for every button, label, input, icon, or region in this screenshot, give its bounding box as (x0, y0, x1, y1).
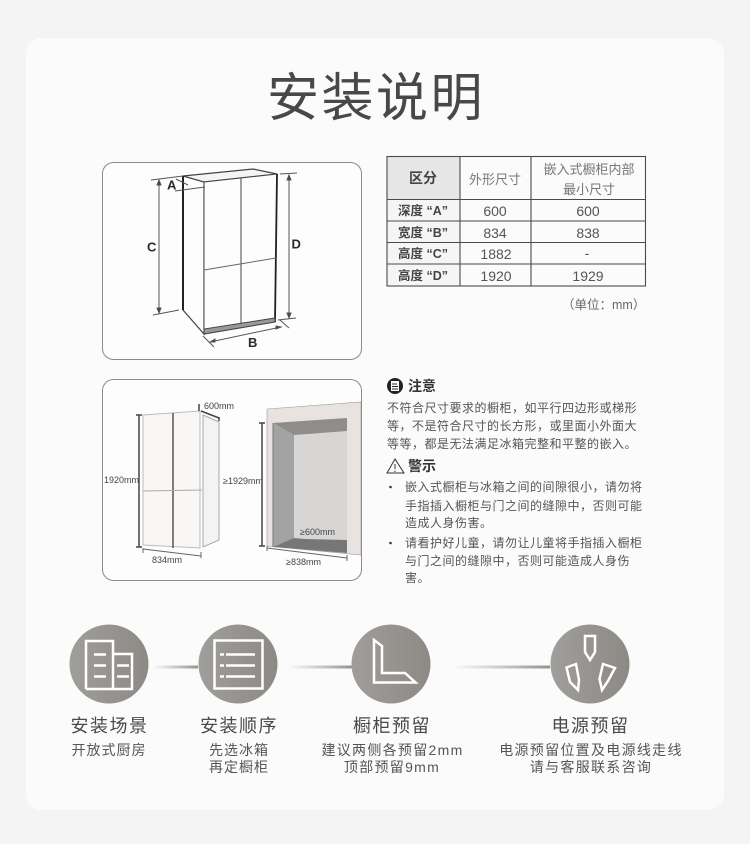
step: power clearance: 电源预留 (552, 716, 630, 736)
size table: 高度 “D” (398, 268, 448, 283)
notice text block: 害。 (405, 570, 430, 585)
dimension labels (147, 178, 301, 350)
clearance labels: ≥838mm (286, 557, 321, 567)
notice text block: 造成人身伤害。 (405, 515, 493, 530)
dimension labels: C (147, 240, 157, 254)
step: power clearance: 电源预留位置及电源线走线 (499, 742, 683, 758)
icon: buildings (70, 624, 148, 704)
notice text block (387, 378, 643, 585)
panel: installation clearance diagram (102, 380, 362, 580)
notice text block: 不符合尺寸要求的橱柜，如平行四边形或梯形 (387, 400, 637, 415)
size table: 外形尺寸 (469, 172, 521, 187)
dimension lines (151, 173, 297, 347)
icon: corner (352, 624, 430, 704)
panel: dimension diagram (102, 162, 362, 360)
step: power clearance: 请与客服联系咨询 (530, 759, 652, 775)
size table: 1920 (480, 268, 512, 284)
dimension labels: A (167, 178, 177, 192)
clearance labels: ≥600mm (300, 527, 335, 537)
size table: - (585, 245, 590, 261)
fridge front (136, 404, 219, 558)
size table: 最小尺寸 (563, 182, 615, 197)
clearance labels: 834mm (152, 555, 182, 565)
size table: 834 (483, 225, 507, 241)
connectors (152, 666, 550, 668)
heading: warning: 警示 (408, 458, 436, 474)
size table: 嵌入式橱柜内部 (543, 162, 635, 177)
title: 安装说明 (267, 70, 485, 128)
notice text block: 与门之间的缝隙中，否则可能造成人身伤 (405, 553, 630, 568)
size table: 高度 “C” (398, 246, 448, 261)
step: power clearance (499, 624, 683, 775)
size table (387, 156, 646, 286)
dimension labels: D (292, 236, 301, 252)
step: installation order: 再定橱柜 (209, 759, 269, 775)
clearance labels: ≥1929mm (223, 476, 263, 486)
icon: warning (387, 459, 404, 473)
size table: 宽度 “B” (398, 225, 448, 240)
size table: 1929 (572, 268, 604, 284)
size table: 区分 (409, 170, 437, 186)
size table: 600 (576, 203, 600, 219)
step: installation scene: 开放式厨房 (72, 742, 146, 758)
size table: 600 (483, 203, 507, 219)
notice text block: 手指插入橱柜与门之间的缝隙中，否则可能 (405, 498, 643, 513)
step: cabinet clearance: 顶部预留9mm (344, 759, 440, 775)
fridge outline (183, 169, 277, 334)
dimension labels: B (248, 335, 257, 350)
heading: notice: 注意 (408, 378, 436, 394)
clearance labels: 600mm (204, 401, 234, 411)
size table: 深度 “A” (398, 203, 448, 218)
step: cabinet clearance: 建议两侧各预留2mm (321, 742, 464, 758)
notice text block: 等等，都是无法满足冰箱完整和平整的嵌入。 (387, 436, 637, 451)
size table: 1882 (480, 246, 512, 262)
clearance labels: 1920mm (104, 475, 139, 485)
clearance labels (104, 401, 335, 567)
size table: 838 (576, 225, 600, 241)
notice text block: 等，不是符合尺寸的长方形，或里面小外面大 (387, 418, 637, 433)
notice text block: 嵌入式橱柜与冰箱之间的间隙很小，请勿将 (405, 479, 643, 494)
cabinet niche (259, 402, 361, 561)
unit note: （单位：mm） (562, 297, 645, 312)
notice text block: 请看护好儿童，请勿让儿童将手指插入橱柜 (405, 535, 643, 550)
icon: list (198, 624, 278, 704)
icon: socket (550, 624, 630, 704)
step: installation scene: 安装场景 (70, 716, 148, 736)
step: installation scene (70, 624, 148, 758)
step: installation order: 先选冰箱 (209, 742, 269, 758)
step: cabinet clearance (321, 624, 464, 775)
step: cabinet clearance: 橱柜预留 (353, 716, 431, 736)
step: installation order: 安装顺序 (200, 716, 278, 736)
icon: note (387, 378, 403, 394)
step: installation order (198, 624, 278, 775)
